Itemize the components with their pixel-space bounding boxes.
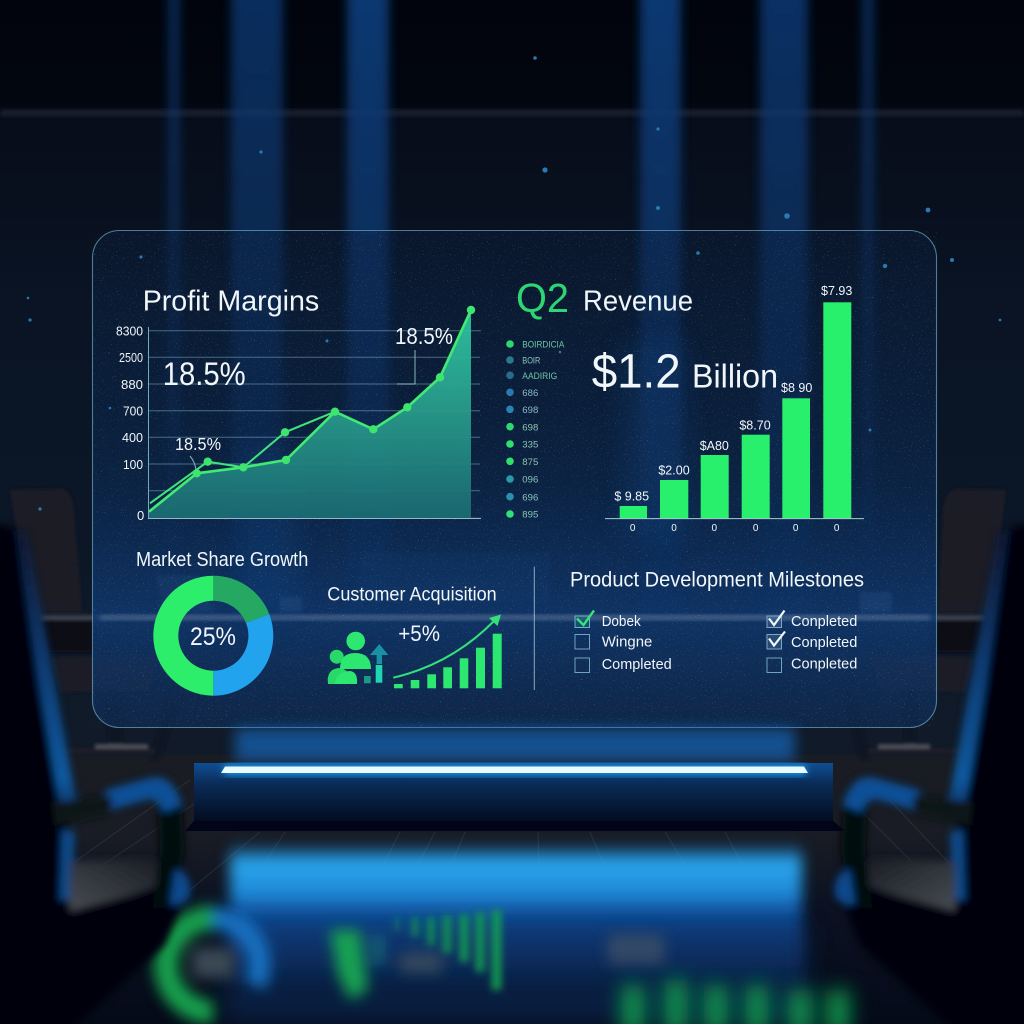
y axis labels: 400 [122,430,143,445]
heading: customer acquisition: Customer Acquisition [327,584,497,606]
growth bars reflection [394,910,501,990]
floor tile lines [70,780,965,900]
bar value labels: $A80 [700,439,729,453]
checkbox: completed: Completed [602,656,672,673]
chart grid lines and axes [148,327,481,518]
base shadow [185,821,845,831]
y axis labels: 8300 [116,324,143,338]
lower back edge [950,830,965,900]
y axis labels: 100 [123,457,143,472]
armrest post [152,795,184,910]
growth value: +5% [398,621,440,646]
donut reflection [166,918,259,1012]
donut chart [153,576,273,696]
legend labels: 686 [522,388,538,399]
revenue unit: Billion [692,357,778,394]
projector glow above base [235,728,795,762]
chair edge highlight [16,530,76,806]
checklist right column [767,610,857,672]
icon reflection [330,930,442,1000]
legend labels: 698 [522,405,538,416]
chart: q2 revenue [516,275,864,534]
milestones reflection [608,934,664,964]
product development milestones [570,568,864,673]
glass panel [92,230,936,728]
donut value: 25% [190,623,236,651]
checkbox: completed two: Conpleted [791,634,857,651]
chair foot [835,870,855,904]
callout large 18.5%: 18.5% [163,356,246,392]
revenue baseline [605,518,864,520]
section divider [533,567,535,690]
legend labels: 895 [522,510,538,521]
revenue figure: $1.2 [592,345,681,398]
legend list [506,340,565,521]
bar axis labels: 0 [753,523,759,534]
bar axis labels: 0 [630,523,636,534]
horizontal wall band [0,110,1024,116]
bar value labels: $8.70 [739,418,771,432]
background table and rear chairs [10,489,1006,760]
rear chair right [938,489,1006,612]
base slab [194,763,833,821]
lower back edge [60,830,75,900]
market share growth [136,549,308,696]
rear chair seats [50,655,160,692]
callout leader lines [190,350,415,470]
seat underside [845,888,1024,1024]
y axis labels: 880 [121,378,143,392]
callout small 18.5%: 18.5% [175,434,221,454]
star particles in panel [93,231,937,728]
chair foot [170,870,190,904]
y axis labels: 2500 [119,351,143,365]
checkbox: completed three: Conpleted [791,655,857,672]
y axis labels [116,324,144,523]
icon: customers [328,632,388,684]
y axis labels: 0 [137,508,144,523]
legend labels: 696 [522,492,538,503]
y axis labels: 700 [123,404,143,418]
blue strip reflection [230,842,802,980]
primary line [149,310,471,512]
legend dots [506,340,514,518]
table top [40,615,985,620]
foreground chair right [835,520,1024,1024]
legend labels: 335 [522,440,538,451]
chair edge highlight [949,530,1009,806]
legend labels: BOIRDICIA [522,340,565,351]
data point markers [192,306,475,477]
floor [0,755,1024,1024]
heading: milestones: Product Development Milestones [570,568,864,592]
legend labels: 875 [522,457,538,468]
chair back [953,520,1024,1024]
seat underside [0,888,180,1024]
bar axis labels: 0 [712,523,718,534]
legend labels [522,340,565,521]
growth arrow [393,614,501,678]
armrest post [841,795,873,910]
bar axis labels: 0 [834,523,840,534]
checkbox: completed one: Conpleted [791,613,857,630]
foreground chair left [0,520,190,1024]
legend labels: BOIR [522,356,540,367]
bar value labels: $2.00 [658,463,690,477]
armrest [105,777,182,812]
legend labels: 096 [522,475,538,486]
area under line [149,310,471,518]
seat [853,858,955,916]
legend labels: 698 [522,422,538,433]
chair legs [108,680,186,760]
chart: profit margins [116,286,481,523]
seat [70,858,172,916]
projector base [185,763,845,831]
under table shadow [40,620,985,652]
legend labels: AADIRIG [522,371,557,382]
revenue bars reflection [622,980,849,1024]
checkbox: dobek: Dobek [602,613,641,630]
bar value labels: $7.93 [821,284,852,298]
chair bases [62,748,155,754]
heading: revenue: Revenue [583,286,693,318]
armrest [843,777,920,812]
bar axis labels: 0 [671,523,677,534]
bar axis labels [630,523,840,534]
checklist left column [575,610,672,673]
scattered glowing particles [27,56,1001,511]
reflected wide glow [224,925,808,1024]
rear chair left [10,489,82,612]
growth bars [394,634,502,688]
bar value labels [614,284,852,504]
heading: Q2: Q2 [516,275,569,321]
revenue bars [620,302,851,518]
checkbox: wingne: Wingne [602,634,652,651]
heading: profit margins: Profit Margins [143,286,319,318]
bar value labels: $ 9.85 [614,490,649,504]
panel inner scene tint [100,340,930,620]
armrest joint [913,796,973,826]
strip glow [224,765,806,775]
chair back [0,520,72,1024]
vertical blue light beams [168,0,874,620]
armrest joint [52,796,112,826]
customer acquisition [327,584,502,688]
light strip [221,766,808,773]
floor reflections [166,842,849,1024]
heading: market share growth: Market Share Growth [136,549,308,571]
callout top 18.5%: 18.5% [395,323,453,349]
bar value labels: $8 90 [781,381,812,395]
secondary line [150,412,335,503]
bar axis labels: 0 [793,523,799,534]
laptop silhouettes [155,575,215,612]
